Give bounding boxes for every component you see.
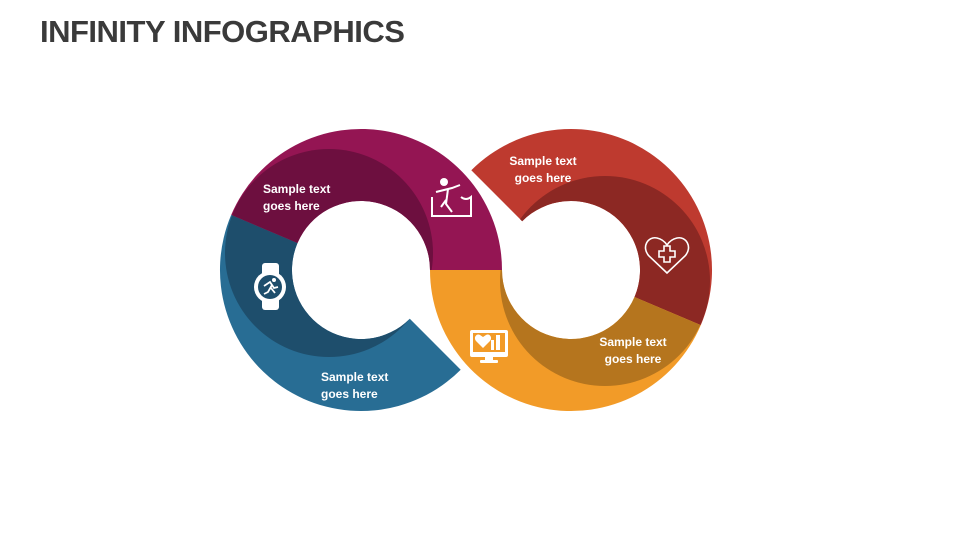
icon: monitor xyxy=(470,330,508,363)
text: orange: Sample text xyxy=(599,335,667,349)
segment: orange xyxy=(430,270,701,411)
text: purple xyxy=(263,182,330,213)
segment: blue xyxy=(220,215,461,411)
text: red: Sample text xyxy=(509,154,577,168)
text: orange: goes here xyxy=(605,352,662,366)
text: blue: Sample text xyxy=(321,370,388,384)
text: blue: goes here xyxy=(321,387,378,401)
icon: swimmer xyxy=(432,178,471,216)
segment: red xyxy=(471,129,712,325)
icon: heart with cross xyxy=(645,238,689,273)
text: blue xyxy=(321,370,388,401)
text: purple: goes here xyxy=(263,199,320,213)
text: purple: Sample text xyxy=(263,182,330,196)
infinity diagram xyxy=(220,129,712,411)
text: orange xyxy=(599,335,667,366)
segment: purple xyxy=(231,129,502,270)
text: red xyxy=(509,154,577,185)
text: red: goes here xyxy=(515,171,572,185)
title: INFINITY INFOGRAPHICS xyxy=(40,14,404,49)
icon: watch xyxy=(254,263,286,310)
